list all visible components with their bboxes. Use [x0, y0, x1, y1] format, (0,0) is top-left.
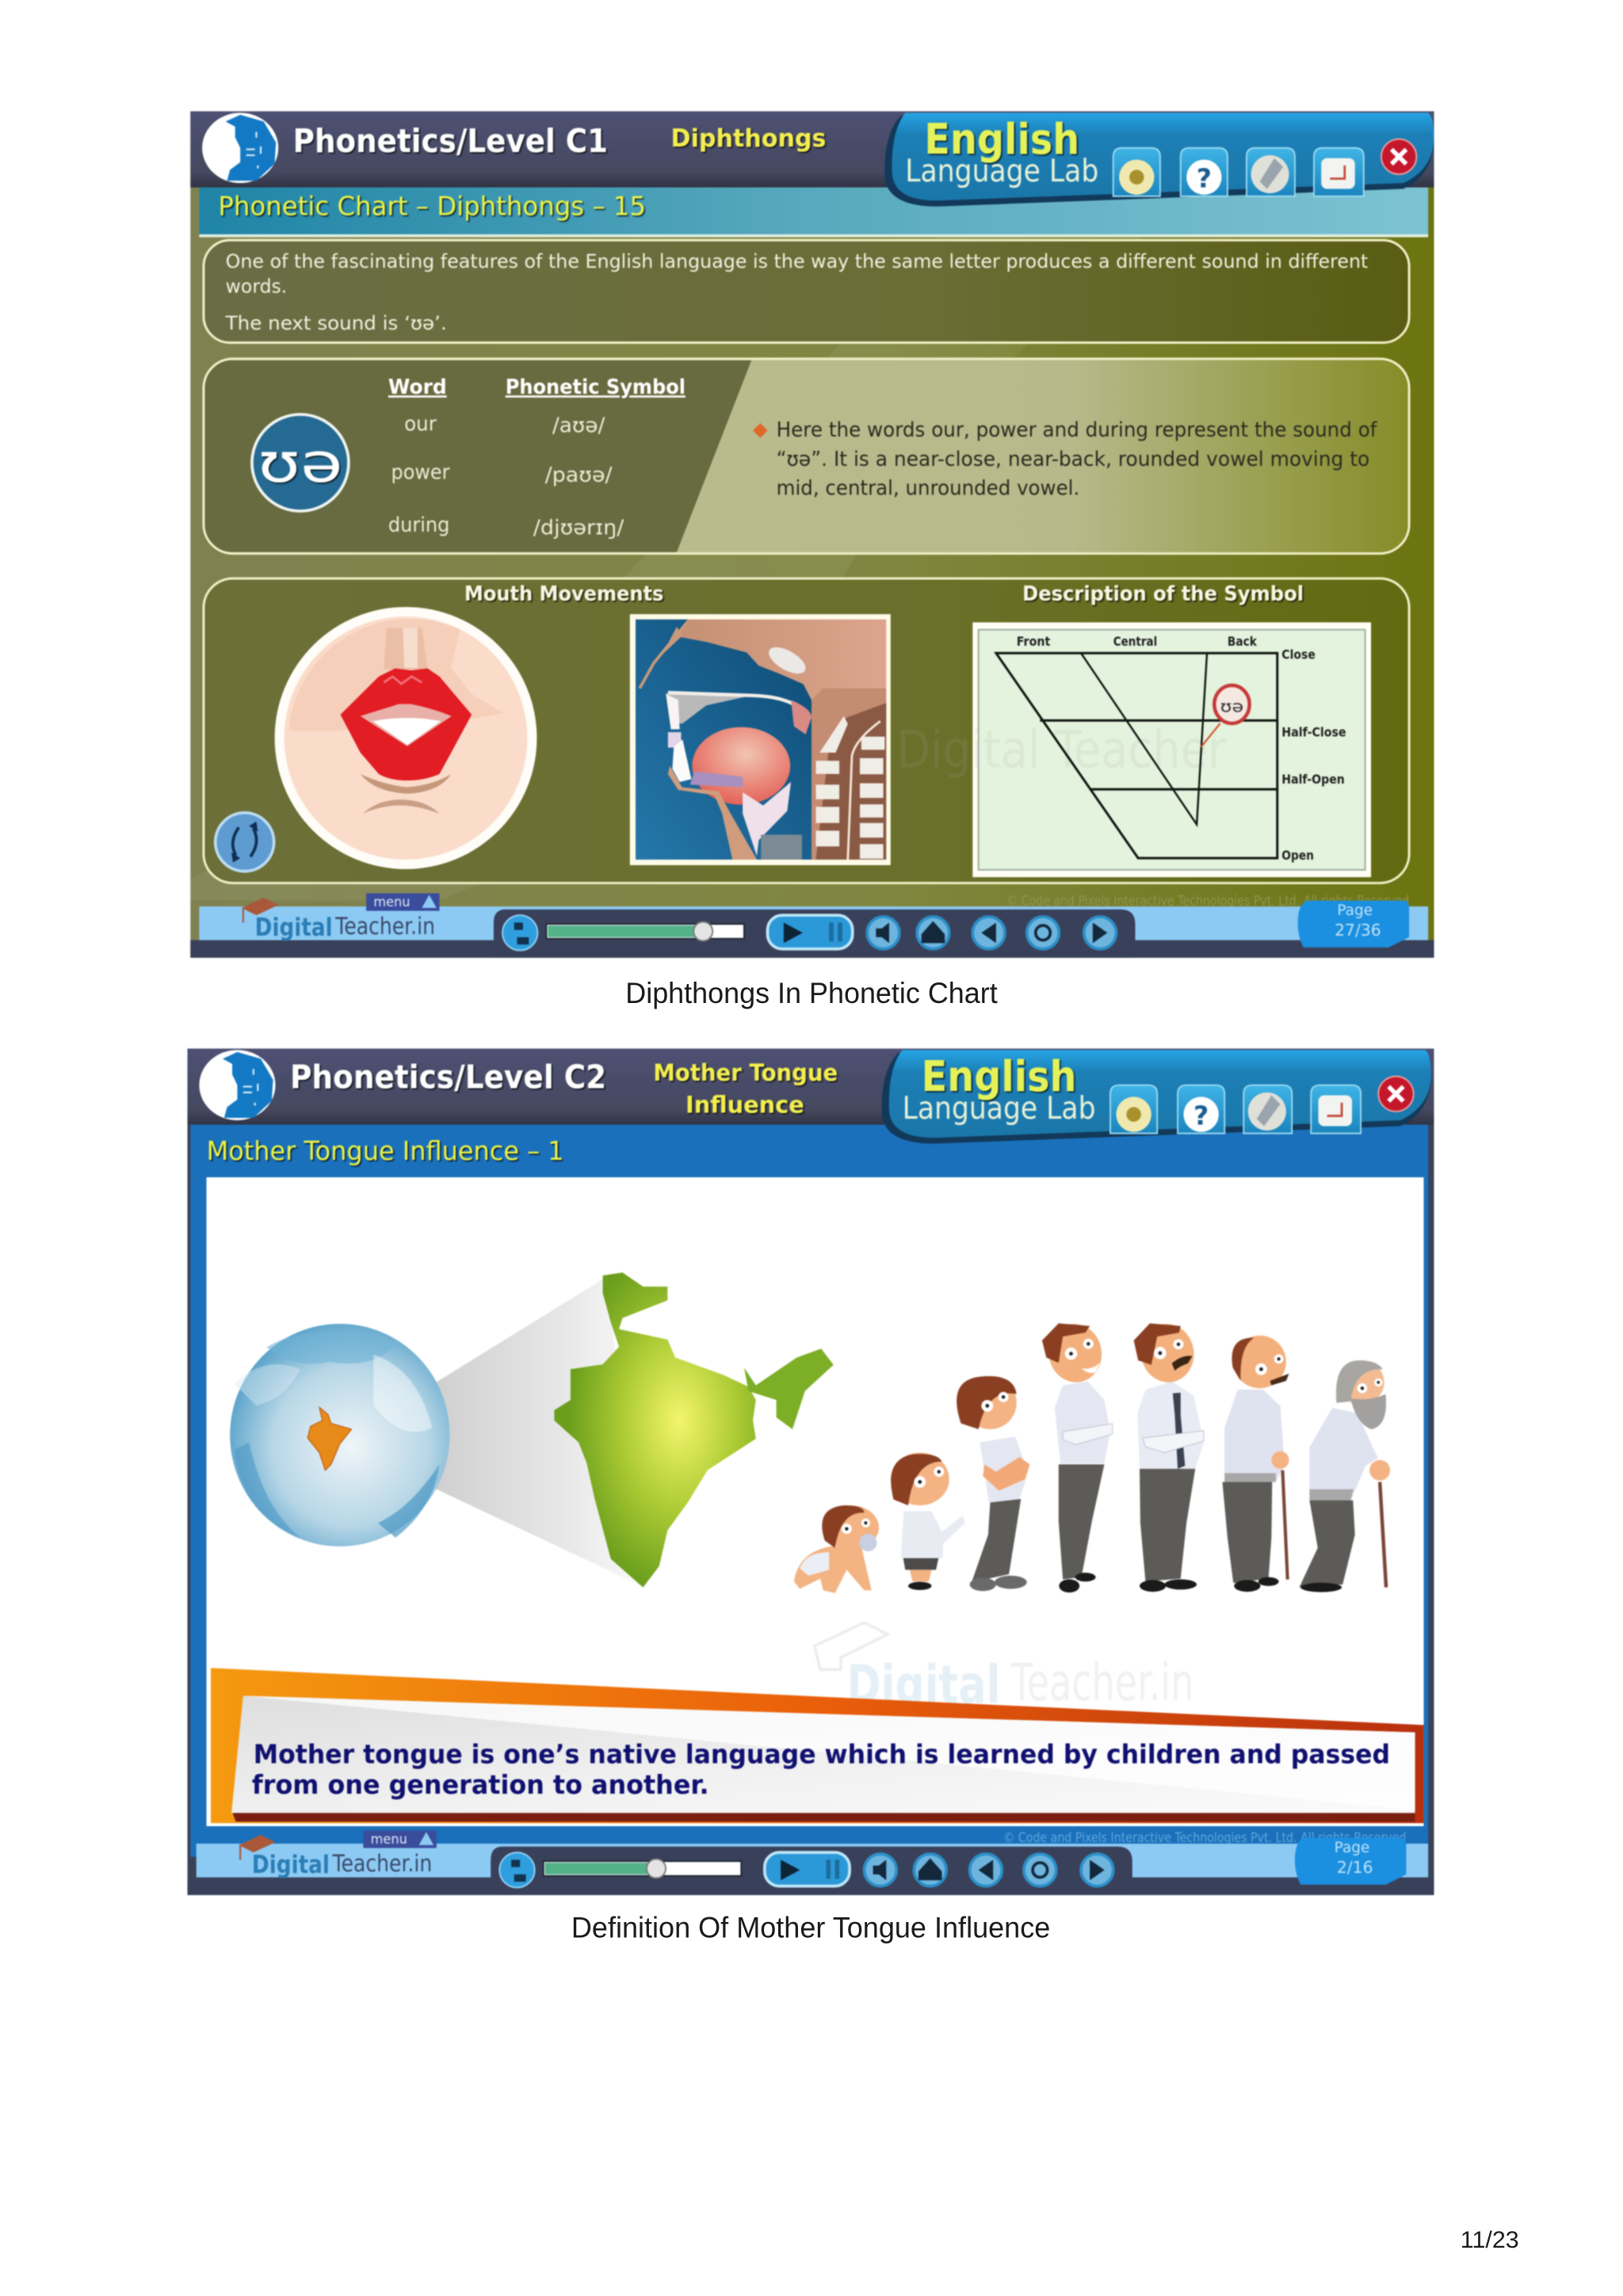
page number tab: 27/36	[1335, 921, 1381, 940]
icon: help tab	[1181, 148, 1228, 196]
page number: 11/23	[1461, 2227, 1519, 2253]
brand badge: English Language Lab: Language Lab	[905, 154, 1098, 189]
page number tab: Page	[1337, 902, 1373, 919]
illustration: older man with cane	[1222, 1336, 1289, 1592]
icon: book tab	[1243, 1085, 1292, 1134]
icon: help tab: ?	[1197, 163, 1212, 194]
caption: mother tongue influence: Definition Of Mother Tongue Influence	[571, 1911, 1050, 1943]
content panel	[207, 1177, 1424, 1826]
chart: vowel quadrilateral: Open	[1281, 848, 1314, 863]
illustration: toddler	[891, 1453, 965, 1590]
word column: power	[391, 460, 450, 484]
screenshot: mother tongue influence	[188, 1048, 1434, 1895]
footer bar	[190, 893, 1434, 958]
page number tab	[1295, 1838, 1406, 1885]
menu tab: menu	[371, 1832, 407, 1847]
chart: vowel quadrilateral: Close	[1281, 647, 1316, 662]
section title: Mother Tongue Influence – 1	[207, 1135, 564, 1166]
media controls	[494, 910, 1135, 958]
decorative swoosh	[190, 237, 1143, 901]
section title band: Phonetic Chart – Diphthongs – 15	[218, 191, 646, 222]
logo: head profile	[202, 113, 278, 183]
symbol badge: ʊə	[258, 433, 343, 495]
icon: camera tab	[1110, 1085, 1157, 1134]
symbol badge	[252, 414, 349, 511]
topic title: Mother Tongue	[653, 1059, 838, 1086]
panel: mouth movements and symbol description	[204, 578, 1409, 883]
logo: Digital Teacher: Digital	[255, 913, 333, 942]
watermark: Digital Teacher: Digital Teacher	[896, 721, 1226, 780]
word column: during	[388, 513, 449, 537]
brand badge: English Language Lab	[884, 113, 1434, 207]
chart: vowel quadrilateral: Back	[1228, 634, 1257, 649]
page number tab: 2/16	[1337, 1858, 1373, 1877]
illustration: mouth front view	[275, 607, 537, 869]
banner: definition	[211, 1668, 1424, 1823]
word column	[388, 376, 450, 537]
watermark: Digital Teacher	[815, 1623, 1193, 1716]
explanation text: “ʊə”. It is a near-close, near-back, rounded vowel moving to	[777, 448, 1369, 471]
menu tab	[363, 1830, 437, 1848]
icon: window tab	[1311, 1085, 1361, 1134]
word column: Word	[388, 376, 447, 399]
media controls	[491, 1847, 1132, 1895]
logo: Digital Teacher: Digital	[252, 1851, 330, 1879]
small India highlight	[307, 1407, 352, 1470]
icon: replay button	[216, 813, 274, 871]
chart: vowel quadrilateral: ʊə	[1220, 696, 1243, 715]
phonetic symbol column: Phonetic Symbol	[506, 376, 685, 399]
watermark: Digital Teacher: Digital	[846, 1654, 1000, 1716]
footer bar	[188, 1830, 1434, 1895]
icon: book tab	[1247, 148, 1295, 196]
logo: Digital Teacher: Teacher.in	[334, 913, 435, 940]
icon: help tab: ?	[1193, 1100, 1209, 1131]
copyright line: © Code and Pixels Interactive Technologies Pvt. Ltd. All rights Reserved	[1006, 893, 1409, 908]
illustration: India map	[554, 1272, 834, 1588]
heading: description of the symbol: Description of the Symbol	[1022, 582, 1304, 606]
word column: our	[404, 412, 437, 436]
page number tab	[1298, 901, 1409, 948]
logo: Digital Teacher	[239, 1835, 432, 1879]
logo: Digital Teacher	[242, 898, 435, 942]
panel: introduction: words.	[226, 276, 287, 298]
lips	[341, 669, 472, 780]
illustration: elderly man with cane	[1299, 1360, 1390, 1592]
icon: window tab	[1314, 148, 1364, 196]
chart: vowel quadrilateral: Half-Open	[1281, 772, 1345, 787]
phonetic symbol column: /djʊərɪŋ/	[533, 517, 624, 540]
chart: vowel quadrilateral	[896, 623, 1371, 877]
chart: vowel quadrilateral: Central	[1113, 634, 1157, 649]
panel: introduction	[204, 240, 1409, 343]
topic title: Diphthongs	[671, 124, 826, 153]
chart: vowel quadrilateral: Front	[1017, 634, 1051, 649]
heading: mouth movements: Mouth Movements	[464, 582, 663, 606]
icon: help tab	[1178, 1085, 1224, 1134]
explanation text: Here the words our, power and during represent the sound of	[777, 418, 1377, 442]
icon: close button	[1378, 1077, 1414, 1112]
explanation text	[777, 418, 1377, 501]
logo: head profile	[199, 1050, 276, 1120]
header bar	[190, 111, 1434, 188]
illustration: vocal tract cross section	[630, 614, 891, 865]
screenshot: diphthongs phonetic chart	[190, 111, 1434, 958]
brand badge: English Language Lab	[882, 1050, 1431, 1144]
illustration: globe	[230, 1324, 449, 1547]
header bar	[188, 1048, 1434, 1125]
menu tab	[366, 893, 440, 911]
illustration: baby	[794, 1505, 879, 1593]
logo: Digital Teacher: Teacher.in	[332, 1850, 432, 1877]
banner: definition: Mother tongue is one’s native language which is learned by children and passed	[254, 1738, 1390, 1769]
topic title	[653, 1059, 838, 1119]
phonetic symbol column	[506, 376, 685, 540]
header title: Phonetics/Level C1	[293, 122, 608, 160]
explanation text: mid, central, unrounded vowel.	[777, 477, 1079, 501]
illustration: adult man with tie	[1134, 1320, 1204, 1592]
panel: introduction: The next sound is ‘ʊə’.	[225, 312, 447, 334]
panel: word table and explanation	[204, 359, 1409, 554]
copyright line: © Code and Pixels Interactive Technologies Pvt. Ltd. All rights Reserved	[1003, 1830, 1406, 1845]
icon: bullet diamond	[753, 423, 768, 438]
banner: definition: from one generation to another.	[252, 1769, 709, 1800]
panel: introduction: One of the fascinating features of the English language is the way the same letter produces a different sound in different	[226, 250, 1368, 273]
page number tab: Page	[1335, 1840, 1369, 1856]
caption: diphthongs: Diphthongs In Phonetic Chart	[625, 977, 998, 1009]
phonetic symbol column: /paʊə/	[545, 463, 613, 487]
brand badge: English Language Lab: Language Lab	[903, 1091, 1096, 1127]
topic title: Influence	[685, 1092, 804, 1119]
menu tab: menu	[373, 894, 411, 910]
brand badge: English Language Lab: English	[922, 1051, 1077, 1101]
brand badge: English Language Lab: English	[924, 114, 1079, 164]
illustration: projection beam	[433, 1277, 644, 1588]
phonetic symbol column: /aʊə/	[552, 414, 605, 437]
icon: camera tab	[1113, 148, 1160, 196]
icon: close button	[1381, 139, 1416, 174]
illustration: boy	[957, 1376, 1029, 1591]
watermark: Digital Teacher: Teacher.in	[1010, 1653, 1193, 1713]
chart: vowel quadrilateral: Half-Close	[1281, 725, 1346, 740]
section title band	[199, 188, 1428, 237]
illustration: young man	[1042, 1320, 1113, 1592]
header title: Phonetics/Level C2	[290, 1058, 606, 1096]
